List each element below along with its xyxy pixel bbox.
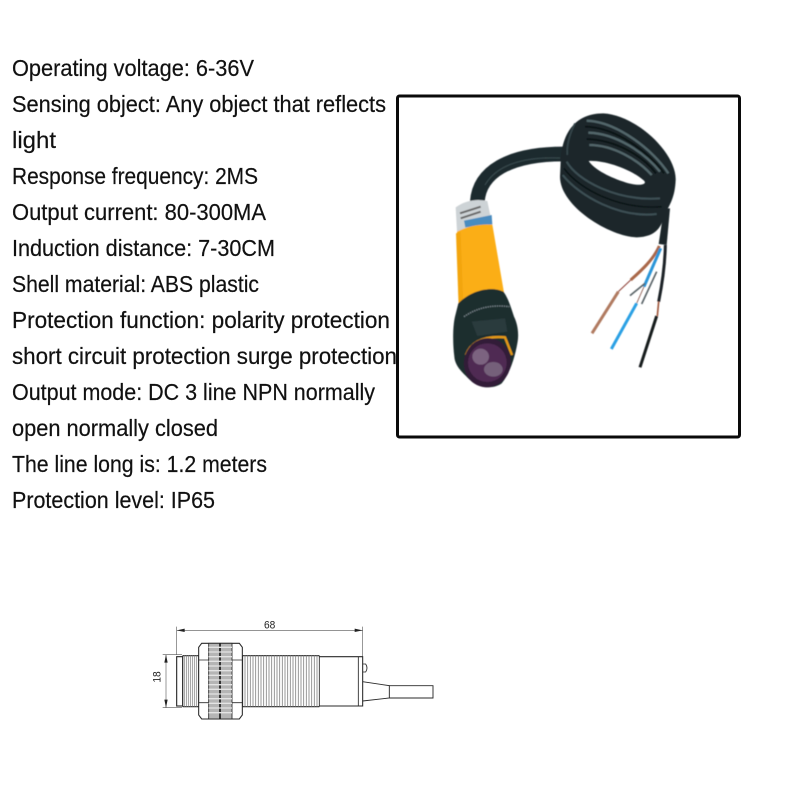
- spec: protection level: Protection level: IP65: [12, 487, 215, 513]
- spec: output mode: Output mode: DC 3 line NPN normally: [12, 379, 375, 405]
- spec: output mode continued: open normally closed: [12, 415, 218, 441]
- spec: sensing object continued: light: [12, 127, 57, 153]
- grey strands: [630, 272, 657, 304]
- cable lead: [477, 154, 567, 202]
- dimension drawing: [152, 620, 433, 719]
- dimension: diameter 18: [152, 655, 182, 708]
- panel: product photo: [398, 96, 740, 437]
- threaded barrel: [177, 656, 319, 707]
- spec: shell material: Shell material: ABS plastic: [12, 271, 259, 297]
- spec: operating voltage: Operating voltage: 6-36V: [12, 55, 255, 81]
- yellow ring: [466, 337, 512, 355]
- yellow body: [457, 224, 505, 307]
- lock nuts: [199, 643, 242, 719]
- spec: induction distance: Induction distance: 7-30CM: [12, 235, 275, 261]
- cable tail: [659, 208, 670, 245]
- black wire: [659, 245, 665, 302]
- spec: protection function continued: short circuit protection surge protection: [12, 343, 397, 369]
- spec: response frequency: Response frequency: 2MS: [12, 163, 258, 189]
- sensor label band: [456, 200, 492, 232]
- brown wire: [631, 246, 659, 280]
- photo frame: [398, 96, 740, 437]
- cable coil: [560, 113, 676, 237]
- spec: protection function: Protection function: polarity protection: [12, 307, 390, 333]
- spec: sensing object: Sensing object: Any object that reflects: [12, 91, 386, 117]
- spec: output current: Output current: 80-300MA: [12, 199, 267, 225]
- nut: [453, 289, 518, 387]
- dimension: length 68: [177, 620, 363, 657]
- blue wire: [644, 248, 661, 287]
- dimension: length 68: 68: [264, 620, 275, 632]
- photo: sensor with cable: [453, 113, 676, 393]
- rear housing: [319, 657, 367, 706]
- dimension: diameter 18: 18: [152, 671, 164, 683]
- spec: line length: The line long is: 1.2 meters: [12, 451, 267, 477]
- lens: [458, 333, 516, 393]
- text block: specifications: [12, 55, 397, 513]
- cable stub: [363, 682, 433, 701]
